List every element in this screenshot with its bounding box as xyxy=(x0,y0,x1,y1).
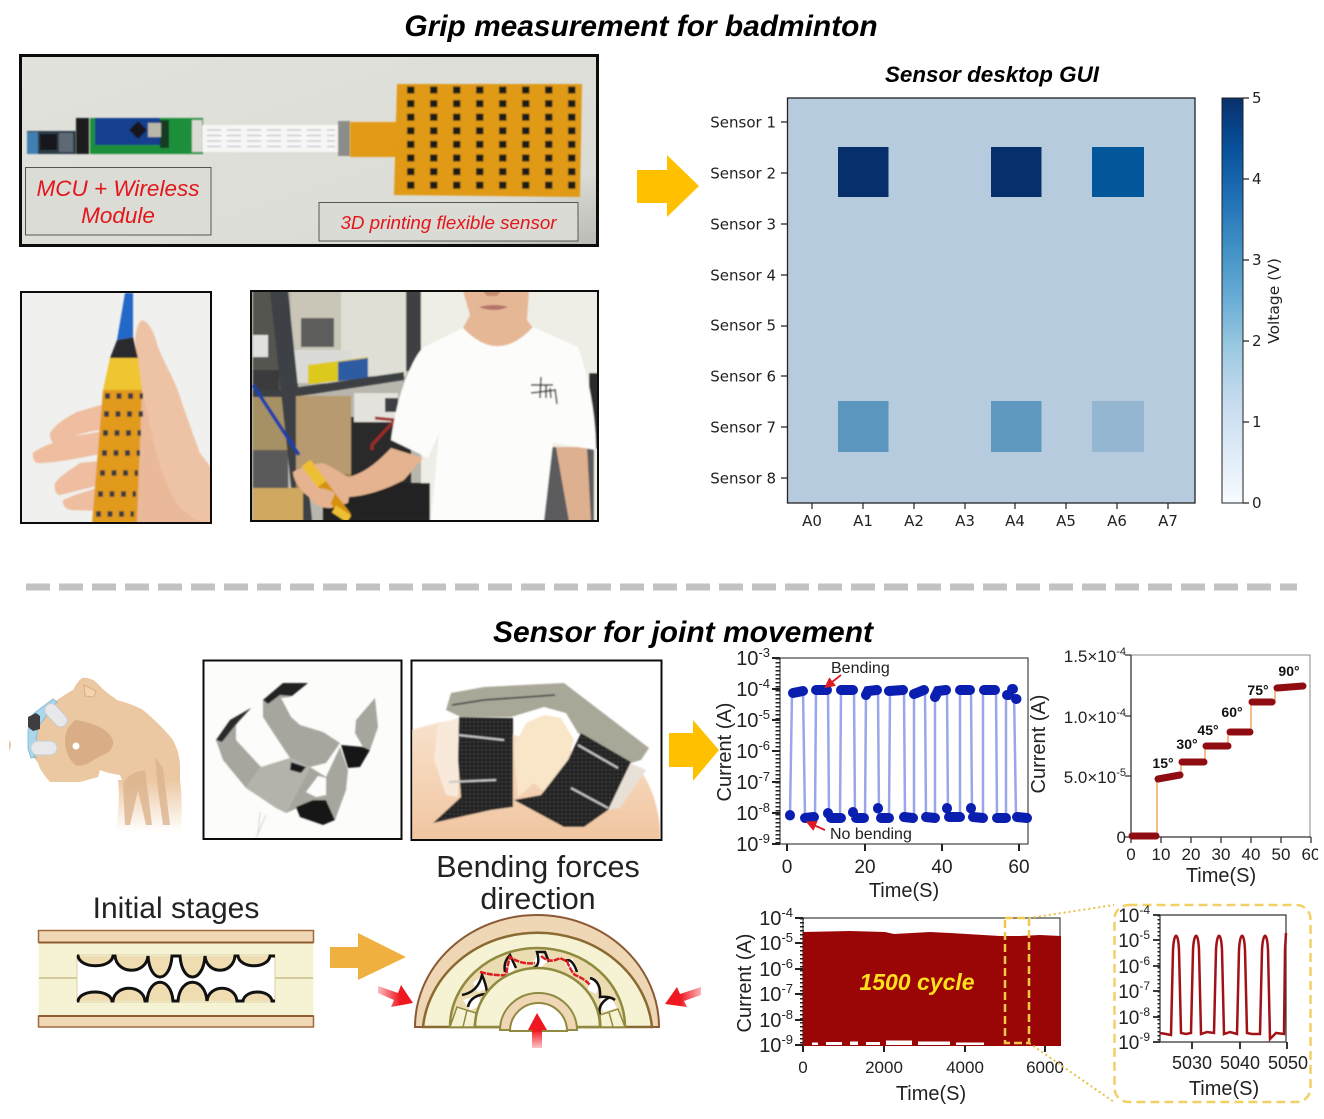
x tick labels: 50 xyxy=(1272,845,1290,864)
data points: high state xyxy=(793,689,1016,699)
icon: white t-shirt xyxy=(391,327,596,521)
sensor row labels: Sensor 5 xyxy=(710,316,776,334)
annotation: 1500 cycle: 1500 cycle xyxy=(859,969,975,995)
x tick labels: 4000 xyxy=(946,1058,984,1077)
axis title: current: Current (A) xyxy=(714,703,736,801)
y tick labels: 10 xyxy=(759,959,781,981)
y tick labels: 5.0×10 xyxy=(1064,768,1116,787)
y tick labels: 10 xyxy=(1118,957,1139,978)
heading: initial stages: Initial stages xyxy=(93,892,259,925)
y tick labels: 10 xyxy=(736,679,758,701)
y tick labels: -9 xyxy=(781,1032,793,1047)
bottom segments xyxy=(450,1007,625,1027)
angle labels: 75° xyxy=(1247,682,1269,698)
x tick labels: 20 xyxy=(1182,845,1200,864)
title: sensor for joint movement: Sensor for joint movement xyxy=(493,616,875,649)
y tick labels: 10 xyxy=(736,648,758,670)
chart: 1500 cycle durability xyxy=(734,905,1064,1105)
y tick labels: -6 xyxy=(1139,954,1150,968)
column labels: A1 xyxy=(853,512,873,530)
angle labels: 15° xyxy=(1152,755,1174,771)
axis title: time: Time(S) xyxy=(896,1083,966,1105)
y tick labels: 10 xyxy=(736,834,758,856)
legend: voltage colour bar: Voltage (V) xyxy=(1265,258,1283,344)
heading: sensor desktop GUI: Sensor desktop GUI xyxy=(885,62,1100,87)
angle labels: 60° xyxy=(1221,704,1243,720)
angle labels xyxy=(1152,663,1300,771)
cycling data block xyxy=(803,931,1061,1046)
sensor splint xyxy=(28,699,70,758)
axis title: current: Current (A) xyxy=(734,934,756,1032)
icon: ribbon cable xyxy=(202,121,350,156)
icon: MCU board xyxy=(76,118,203,154)
column labels: A2 xyxy=(904,512,924,530)
data points: low state xyxy=(790,808,1027,818)
data trace xyxy=(1160,933,1286,1039)
x tick labels xyxy=(1172,1053,1308,1073)
sensor row labels: Sensor 4 xyxy=(710,266,776,284)
angle labels: 30° xyxy=(1176,736,1198,752)
y tick labels: 10 xyxy=(1118,1033,1139,1054)
arrow: hardware to GUI xyxy=(637,155,699,217)
icon: racket grip xyxy=(92,390,142,523)
icon: fingers xyxy=(33,404,104,511)
diagram: flat sensor cross-section xyxy=(38,930,314,1027)
axis title: time: Time(S) xyxy=(869,880,939,902)
arrow: photos to charts xyxy=(669,720,719,781)
column labels: A3 xyxy=(955,512,975,530)
x tick labels: 6000 xyxy=(1026,1058,1064,1077)
y tick labels: -7 xyxy=(781,981,793,996)
x tick labels: 20 xyxy=(854,857,876,878)
y tick labels: 10 xyxy=(759,1035,781,1057)
y tick labels: 10 xyxy=(1118,982,1139,1003)
angle labels: 90° xyxy=(1278,663,1300,679)
heatmap cells row 7 xyxy=(838,401,1144,452)
legend: voltage colour bar: 4 xyxy=(1252,170,1262,188)
x tick labels: 5040 xyxy=(1220,1053,1260,1073)
arrow: bottom bending force xyxy=(528,1013,547,1048)
arrow: left bending force xyxy=(378,985,413,1007)
x tick labels: 5050 xyxy=(1268,1053,1308,1073)
x tick labels: 60 xyxy=(1302,845,1320,864)
y tick labels: 10 xyxy=(1118,931,1139,952)
y tick labels: 10 xyxy=(759,933,781,955)
sensor pads on grip xyxy=(96,396,143,514)
x tick labels: 0 xyxy=(798,1058,808,1077)
icon: flexible sensor array xyxy=(350,84,582,197)
diagram: bent sensor cross-section xyxy=(415,915,659,1031)
sensor row labels: Sensor 2 xyxy=(710,164,776,182)
column labels xyxy=(802,512,1178,530)
y tick labels: 10 xyxy=(759,908,781,930)
y tick labels: 0 xyxy=(1117,828,1126,847)
label: 3D printing flexible sensor: 3D printing flexible sensor xyxy=(340,212,557,233)
panel: sensor with velcro strap photo xyxy=(204,660,402,839)
legend: voltage colour bar: 3 xyxy=(1252,251,1262,269)
icon: face and neck xyxy=(463,291,533,346)
y tick labels xyxy=(759,905,793,1057)
legend: voltage colour bar xyxy=(1222,89,1283,512)
icon: racket shaft xyxy=(253,385,299,455)
annotation: no bending: No bending xyxy=(830,826,912,843)
bottom scallops xyxy=(77,982,275,1001)
sensor row labels: Sensor 8 xyxy=(710,470,776,488)
y tick labels: 1.0×10 xyxy=(1064,708,1116,727)
y tick labels: -9 xyxy=(758,831,770,846)
legend: voltage colour bar: 1 xyxy=(1252,413,1262,431)
y tick labels: -6 xyxy=(781,956,793,971)
heading: bending forces direction: direction xyxy=(480,882,596,916)
y tick labels: -4 xyxy=(1139,903,1150,917)
annotation: bending: Bending xyxy=(831,660,890,677)
chart: current vs bending angle xyxy=(1028,646,1324,887)
heading: bending forces direction xyxy=(436,850,640,916)
y tick labels: 10 xyxy=(736,741,758,763)
data trace xyxy=(790,690,1028,818)
y tick labels: -8 xyxy=(781,1007,793,1022)
annotation: no bending xyxy=(809,823,912,843)
top scallops xyxy=(77,956,275,977)
annotation: bending xyxy=(827,660,890,686)
x tick labels: 40 xyxy=(1242,845,1260,864)
icon: bent finger hand with sensor xyxy=(9,678,182,832)
heading: bending forces direction: Bending forces xyxy=(436,850,640,884)
x tick labels: 2000 xyxy=(865,1058,903,1077)
x tick labels: 40 xyxy=(931,857,953,878)
y tick labels xyxy=(736,645,770,856)
y tick labels: 10 xyxy=(736,803,758,825)
column labels: A5 xyxy=(1056,512,1076,530)
y tick labels: 10 xyxy=(759,984,781,1006)
x tick labels: 0 xyxy=(1126,845,1136,864)
icon: racket grip xyxy=(306,463,349,519)
y tick labels xyxy=(1064,646,1126,847)
sensor row labels: Sensor 6 xyxy=(710,368,776,386)
y tick labels: -5 xyxy=(758,707,770,722)
y tick labels: -4 xyxy=(758,676,770,691)
x tick labels xyxy=(782,857,1030,878)
y tick labels: -8 xyxy=(758,800,770,815)
connector: zoom lines xyxy=(1029,905,1114,1102)
y tick labels: -6 xyxy=(758,738,770,753)
sensor row labels: Sensor 1 xyxy=(710,114,776,132)
column labels: A6 xyxy=(1107,512,1127,530)
y tick labels: 1.5×10 xyxy=(1064,647,1116,666)
axis title: time: Time(S) xyxy=(1186,865,1256,887)
red deformed edge xyxy=(480,956,590,985)
panel: player holding racket photo xyxy=(251,291,598,521)
column labels: A0 xyxy=(802,512,822,530)
sensor row labels: Sensor 7 xyxy=(710,418,776,436)
y tick labels: 10 xyxy=(1118,906,1139,927)
black scallop edges xyxy=(462,952,615,1015)
heatmap cells row 2 xyxy=(838,147,1144,197)
y tick labels: -4 xyxy=(1116,707,1126,719)
column labels: A4 xyxy=(1005,512,1025,530)
x tick labels xyxy=(1126,845,1320,864)
open cells xyxy=(463,952,617,1012)
arrow: initial to bent xyxy=(330,933,406,980)
legend: voltage colour bar: 0 xyxy=(1252,494,1262,512)
legend: voltage colour bar: 2 xyxy=(1252,332,1262,350)
y tick labels xyxy=(1118,903,1150,1054)
y tick labels: 10 xyxy=(1118,1008,1139,1029)
y tick labels: 10 xyxy=(736,710,758,732)
x tick labels: 10 xyxy=(1152,845,1170,864)
label: 3D printing flexible sensor xyxy=(319,202,578,241)
x tick labels: 60 xyxy=(1008,857,1030,878)
arrow: right bending force xyxy=(665,987,701,1007)
panel: hand gripping racket photo xyxy=(21,292,212,523)
label: MCU + Wireless Module: Module xyxy=(81,203,155,228)
icon: palm and thumb xyxy=(130,320,212,523)
icon: arm and hand xyxy=(293,448,423,508)
y tick labels: -7 xyxy=(758,769,770,784)
chart: zoomed cycle inset xyxy=(1114,903,1310,1102)
column labels: A7 xyxy=(1158,512,1178,530)
title: grip measurement: Grip measurement for badminton xyxy=(404,10,878,43)
angle labels: 45° xyxy=(1197,722,1219,738)
panel: sensor hardware photo xyxy=(20,56,598,246)
y tick labels: -9 xyxy=(1139,1030,1150,1044)
sensor row labels xyxy=(710,114,776,488)
legend: voltage colour bar: 5 xyxy=(1252,89,1262,107)
axis title: time: Time(S) xyxy=(1189,1078,1259,1100)
y tick labels: -8 xyxy=(1139,1005,1150,1019)
y tick labels: -5 xyxy=(781,930,793,945)
x tick labels: 5030 xyxy=(1172,1053,1212,1073)
chart: bending on/off current xyxy=(714,645,1030,902)
y tick labels: -5 xyxy=(1116,767,1126,779)
y tick labels: -4 xyxy=(1116,646,1126,658)
label: MCU + Wireless Module xyxy=(26,168,211,235)
x tick labels: 0 xyxy=(782,857,792,878)
y tick labels: -3 xyxy=(758,645,770,660)
y tick labels: -4 xyxy=(781,905,793,920)
icon: shirt logo xyxy=(531,377,557,404)
data steps xyxy=(1132,686,1303,836)
panel: sensor worn on finger photo xyxy=(412,660,662,840)
y tick labels: 10 xyxy=(736,772,758,794)
chart: sensor voltage heatmap xyxy=(710,98,1195,530)
axis title: current: Current (A) xyxy=(1028,695,1050,793)
y tick labels: -5 xyxy=(1139,928,1150,942)
x tick labels: 30 xyxy=(1212,845,1230,864)
label: MCU + Wireless Module: MCU + Wireless xyxy=(37,176,199,201)
sensor row labels: Sensor 3 xyxy=(710,216,776,234)
icon: wireless module xyxy=(27,131,76,154)
y tick labels: 10 xyxy=(759,1010,781,1032)
zoom selection box xyxy=(1005,918,1029,1043)
x tick labels xyxy=(798,1058,1064,1077)
y tick labels: -7 xyxy=(1139,979,1150,993)
